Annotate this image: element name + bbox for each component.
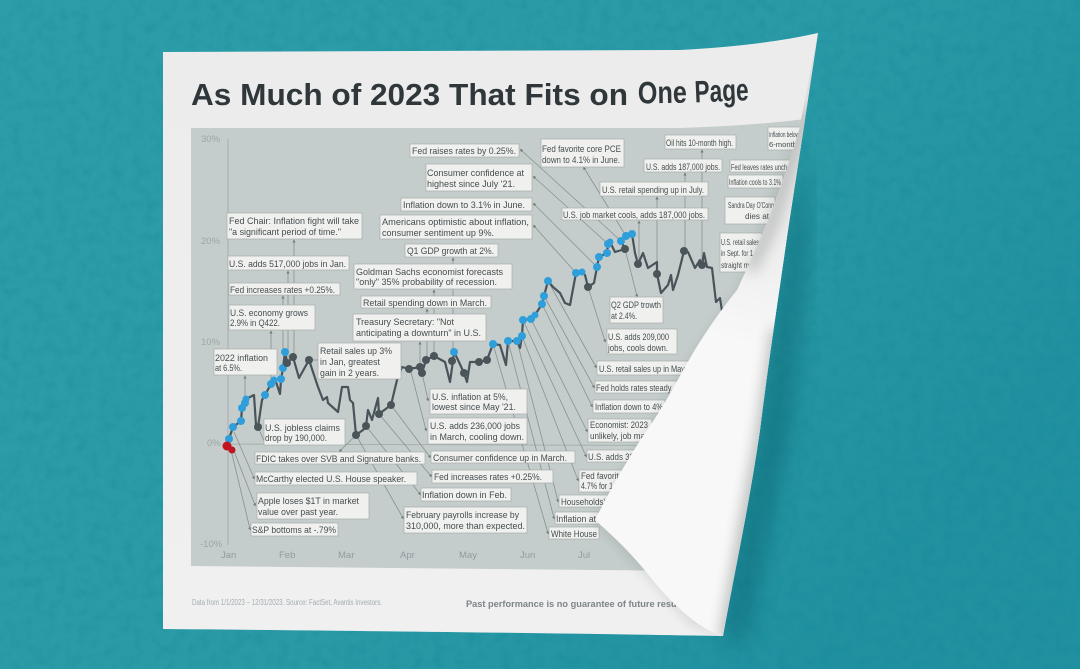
- callout: 236,000 jobs: U.S. adds 236,000 jobs: [430, 421, 520, 432]
- callout: 236,000 jobs: in March, cooling down.: [430, 432, 524, 443]
- callout: Consumer confidence at highest: Consumer confidence at: [427, 168, 524, 179]
- callout: Q2 GDP: at 2.4%.: [611, 311, 637, 322]
- callout: Consumer confidence at highest: highest since July '21.: [427, 179, 515, 190]
- callout: Goldman Sachs: "only" 35% probability of recession.: [356, 277, 497, 288]
- callout: jobless claims: U.S. jobless claims: [265, 423, 340, 434]
- callout: economy grows: 2.9% in Q422.: [230, 318, 280, 329]
- callout: Apple: Apple loses $1T in market: [258, 496, 359, 507]
- callout: Economist: [588, 419, 652, 442]
- callout: retail sales Sept: U.S. retail sales: [721, 237, 759, 247]
- callout: Fed leaves rates: [730, 160, 790, 172]
- callout: Sandra Day O'Connor: dies at: [745, 211, 770, 221]
- callout: Inflation cools: Inflation cools to 3.1%: [729, 177, 781, 187]
- axis labels: Feb: [279, 550, 295, 561]
- callout: Q2 GDP: Q2 GDP trowth: [611, 300, 661, 311]
- callout: White House: White House: [551, 529, 597, 540]
- callout: job market cools: U.S. job market cools, adds 187,000 jobs.: [563, 210, 705, 221]
- callout: S&P bottoms: S&P bottoms at -.79%: [252, 525, 336, 536]
- callout: Treasury Secretary: Treasury Secretary: "Not: [356, 317, 454, 328]
- axis labels: Mar: [338, 550, 354, 561]
- callout: jobless claims: [264, 419, 345, 445]
- callout: Economist: Economist: 2023: [590, 420, 648, 431]
- callout: retail sales up: [318, 343, 401, 379]
- callout: Oil hits: Oil hits 10-month high.: [666, 138, 733, 149]
- callout: Fed Chair: [227, 213, 362, 239]
- shadow of the flap on the page: [592, 120, 800, 635]
- callout: US adds 33: U.S. adds 33: [588, 452, 634, 463]
- callout: Sandra Day O'Connor: [725, 197, 775, 224]
- callout: Fed holds rates: Fed holds rates steady.: [596, 383, 673, 394]
- callout: February payrolls: February payrolls increase by: [406, 510, 519, 521]
- callout: Inflation down to 3.1%: Inflation down to 3.1% in June.: [403, 200, 525, 211]
- callout: Inflation at: Inflation at: [556, 514, 596, 525]
- callout: Apple: value over past year.: [258, 507, 338, 518]
- callout: 2022 inflation: 2022 inflation: [215, 353, 268, 364]
- title: As Much of 2023 That Fits on: [191, 77, 628, 112]
- callout: FDIC: FDIC takes over SVB and Signature banks.: [256, 454, 421, 465]
- callout: Fed Chair: "a significant period of time.": [229, 227, 341, 238]
- callout: 209,000 jobs: [607, 329, 677, 354]
- callout: Inflation down to 4: Inflation down to 4%: [595, 402, 663, 413]
- connector lines: [231, 150, 702, 533]
- shadow of the page on the background: [722, 150, 808, 640]
- S&P price line: [228, 234, 722, 447]
- callout: retail sales up: in Jan, greatest: [320, 357, 380, 368]
- callout: Fed favorite 4.7%: Fed favorite: [581, 471, 623, 482]
- axis labels: May: [459, 550, 477, 561]
- callout: Q2 GDP: [610, 297, 663, 323]
- axis labels: -10%: [200, 539, 223, 550]
- callout: Americans optimistic: [380, 215, 532, 239]
- callout: 2022 inflation: [214, 349, 277, 375]
- footnote: disclaimer: Past performance is no guarantee of future results.: [466, 599, 690, 609]
- callout: Fed favorite core PCE: [541, 139, 624, 167]
- callout: Apple: [257, 493, 369, 519]
- callout: Fed favorite 4.7%: 4.7% for 1: [581, 481, 613, 492]
- callout: retail spending July: U.S. retail spending up in July.: [602, 185, 704, 196]
- callout: Consumer confidence up: Consumer confidence up in March.: [433, 453, 567, 464]
- callout: Goldman Sachs: [354, 264, 512, 289]
- page curl flap: [580, 25, 825, 645]
- axis labels: 20%: [201, 236, 221, 247]
- title: [192, 80, 748, 108]
- callout: Treasury Secretary: anticipating a downturn" in U.S.: [356, 328, 481, 339]
- axis labels: 0%: [207, 438, 221, 449]
- axis labels: [200, 134, 590, 561]
- callout: inflation at 5%: U.S. inflation at 5%,: [432, 392, 508, 403]
- axis labels: Apr: [400, 550, 415, 561]
- callout: Fed increases rates: Fed increases rates +0.25%.: [230, 285, 335, 296]
- callout: Treasury Secretary: [353, 314, 486, 341]
- callout: 209,000 jobs: jobs, cools down.: [607, 343, 668, 354]
- callout: economy grows: U.S. economy grows: [230, 308, 308, 319]
- callout: Fed leaves rates: Fed leaves rates unch: [731, 162, 787, 172]
- callout: 187,000 jobs: U.S. adds 187,000 jobs.: [646, 162, 720, 173]
- title: Page: [694, 72, 749, 109]
- footnote: source: Data from 1/1/2023 – 12/31/2023. Source: FactSet, Avantis Investors.: [192, 598, 382, 607]
- callout: Fed favorite core PCE: Fed favorite core PCE: [542, 144, 621, 155]
- paper sheet: [160, 30, 830, 640]
- callout: retail sales up: gain in 2 years.: [320, 368, 379, 379]
- callout: economy grows: [229, 305, 315, 330]
- callout: Goldman Sachs: Goldman Sachs economist forecasts: [356, 267, 503, 278]
- callout: jobless claims: drop by 190,000.: [265, 433, 327, 444]
- callout: retail sales Sept: [720, 233, 762, 272]
- callout labels: [214, 127, 802, 540]
- callout: 209,000 jobs: U.S. adds 209,000: [608, 332, 669, 343]
- markers: positive data points: [225, 230, 636, 443]
- markers: start of year: [222, 442, 236, 454]
- callout: Inflation below: Inflation below: [769, 132, 800, 139]
- callout: Economist: unlikely, job ma: [590, 431, 646, 442]
- callout: 2022 inflation: at 6.5%.: [215, 363, 242, 374]
- callout: Fed Chair: Fed Chair: Inflation fight will take: [229, 216, 359, 227]
- callout: retail sales Sept: straight m: [721, 260, 749, 270]
- callout: 517,000 jobs: U.S. adds 517,000 jobs in Jan.: [229, 259, 346, 270]
- callout: 236,000 jobs: [428, 418, 527, 444]
- callout: Inflation down in Feb: Inflation down in Feb.: [422, 490, 507, 501]
- callout: Households: Households': [561, 497, 605, 508]
- callout: Consumer confidence at highest: [426, 164, 532, 191]
- callout: Sandra Day O'Connor: Sandra Day O'Conn: [728, 200, 774, 210]
- title: One: [638, 75, 687, 110]
- callout: retail sales May: U.S. retail sales up in May: [599, 364, 685, 375]
- callout: Fed favorite 4.7%: [579, 470, 625, 492]
- callout: Inflation cools: [728, 175, 783, 188]
- callout: 187,000 jobs: [644, 159, 722, 173]
- callout: February payrolls: [404, 507, 527, 533]
- callout: Oil hits: [665, 135, 736, 149]
- callout: Fed raises rates: Fed raises rates by 0.25%.: [412, 146, 516, 157]
- panel: chart background: [191, 119, 805, 572]
- axis labels: 10%: [201, 337, 221, 348]
- axis labels: Jun: [520, 550, 535, 561]
- callout: Americans optimistic: Americans optimistic about inflation,: [382, 217, 529, 228]
- callout: Fed increases rates second: Fed increases rates +0.25%.: [434, 472, 542, 483]
- callout: Americans optimistic: consumer sentiment up 9%.: [382, 228, 494, 239]
- callout: retail sales May: [597, 361, 689, 375]
- callout: retail spending July: [600, 182, 708, 196]
- callout: Retail spending down: Retail spending down in March.: [363, 298, 487, 309]
- callout: Inflation down to 4: [593, 400, 665, 413]
- markers: negative data points: [254, 245, 706, 439]
- callout: Fed favorite core PCE: down to 4.1% in June.: [542, 155, 620, 166]
- callout: McCarthy: McCarthy elected U.S. House speaker.: [256, 474, 406, 485]
- callout: February payrolls: 310,000, more than expected.: [406, 521, 525, 532]
- axis labels: Jul: [578, 550, 590, 561]
- callout: Inflation below: [768, 127, 802, 150]
- callout: Inflation below: 6-month: [769, 142, 797, 149]
- callout: retail sales Sept: in Sept. for 1: [721, 248, 753, 258]
- callout: Q1 GDP: Q1 GDP growth at 2%.: [407, 246, 494, 257]
- callout: retail sales up: Retail sales up 3%: [320, 346, 393, 357]
- callout: inflation at 5%: [430, 389, 527, 414]
- axis labels: Jan: [221, 550, 236, 561]
- axis labels: 30%: [201, 134, 221, 145]
- callout: inflation at 5%: lowest since May '21.: [432, 402, 516, 413]
